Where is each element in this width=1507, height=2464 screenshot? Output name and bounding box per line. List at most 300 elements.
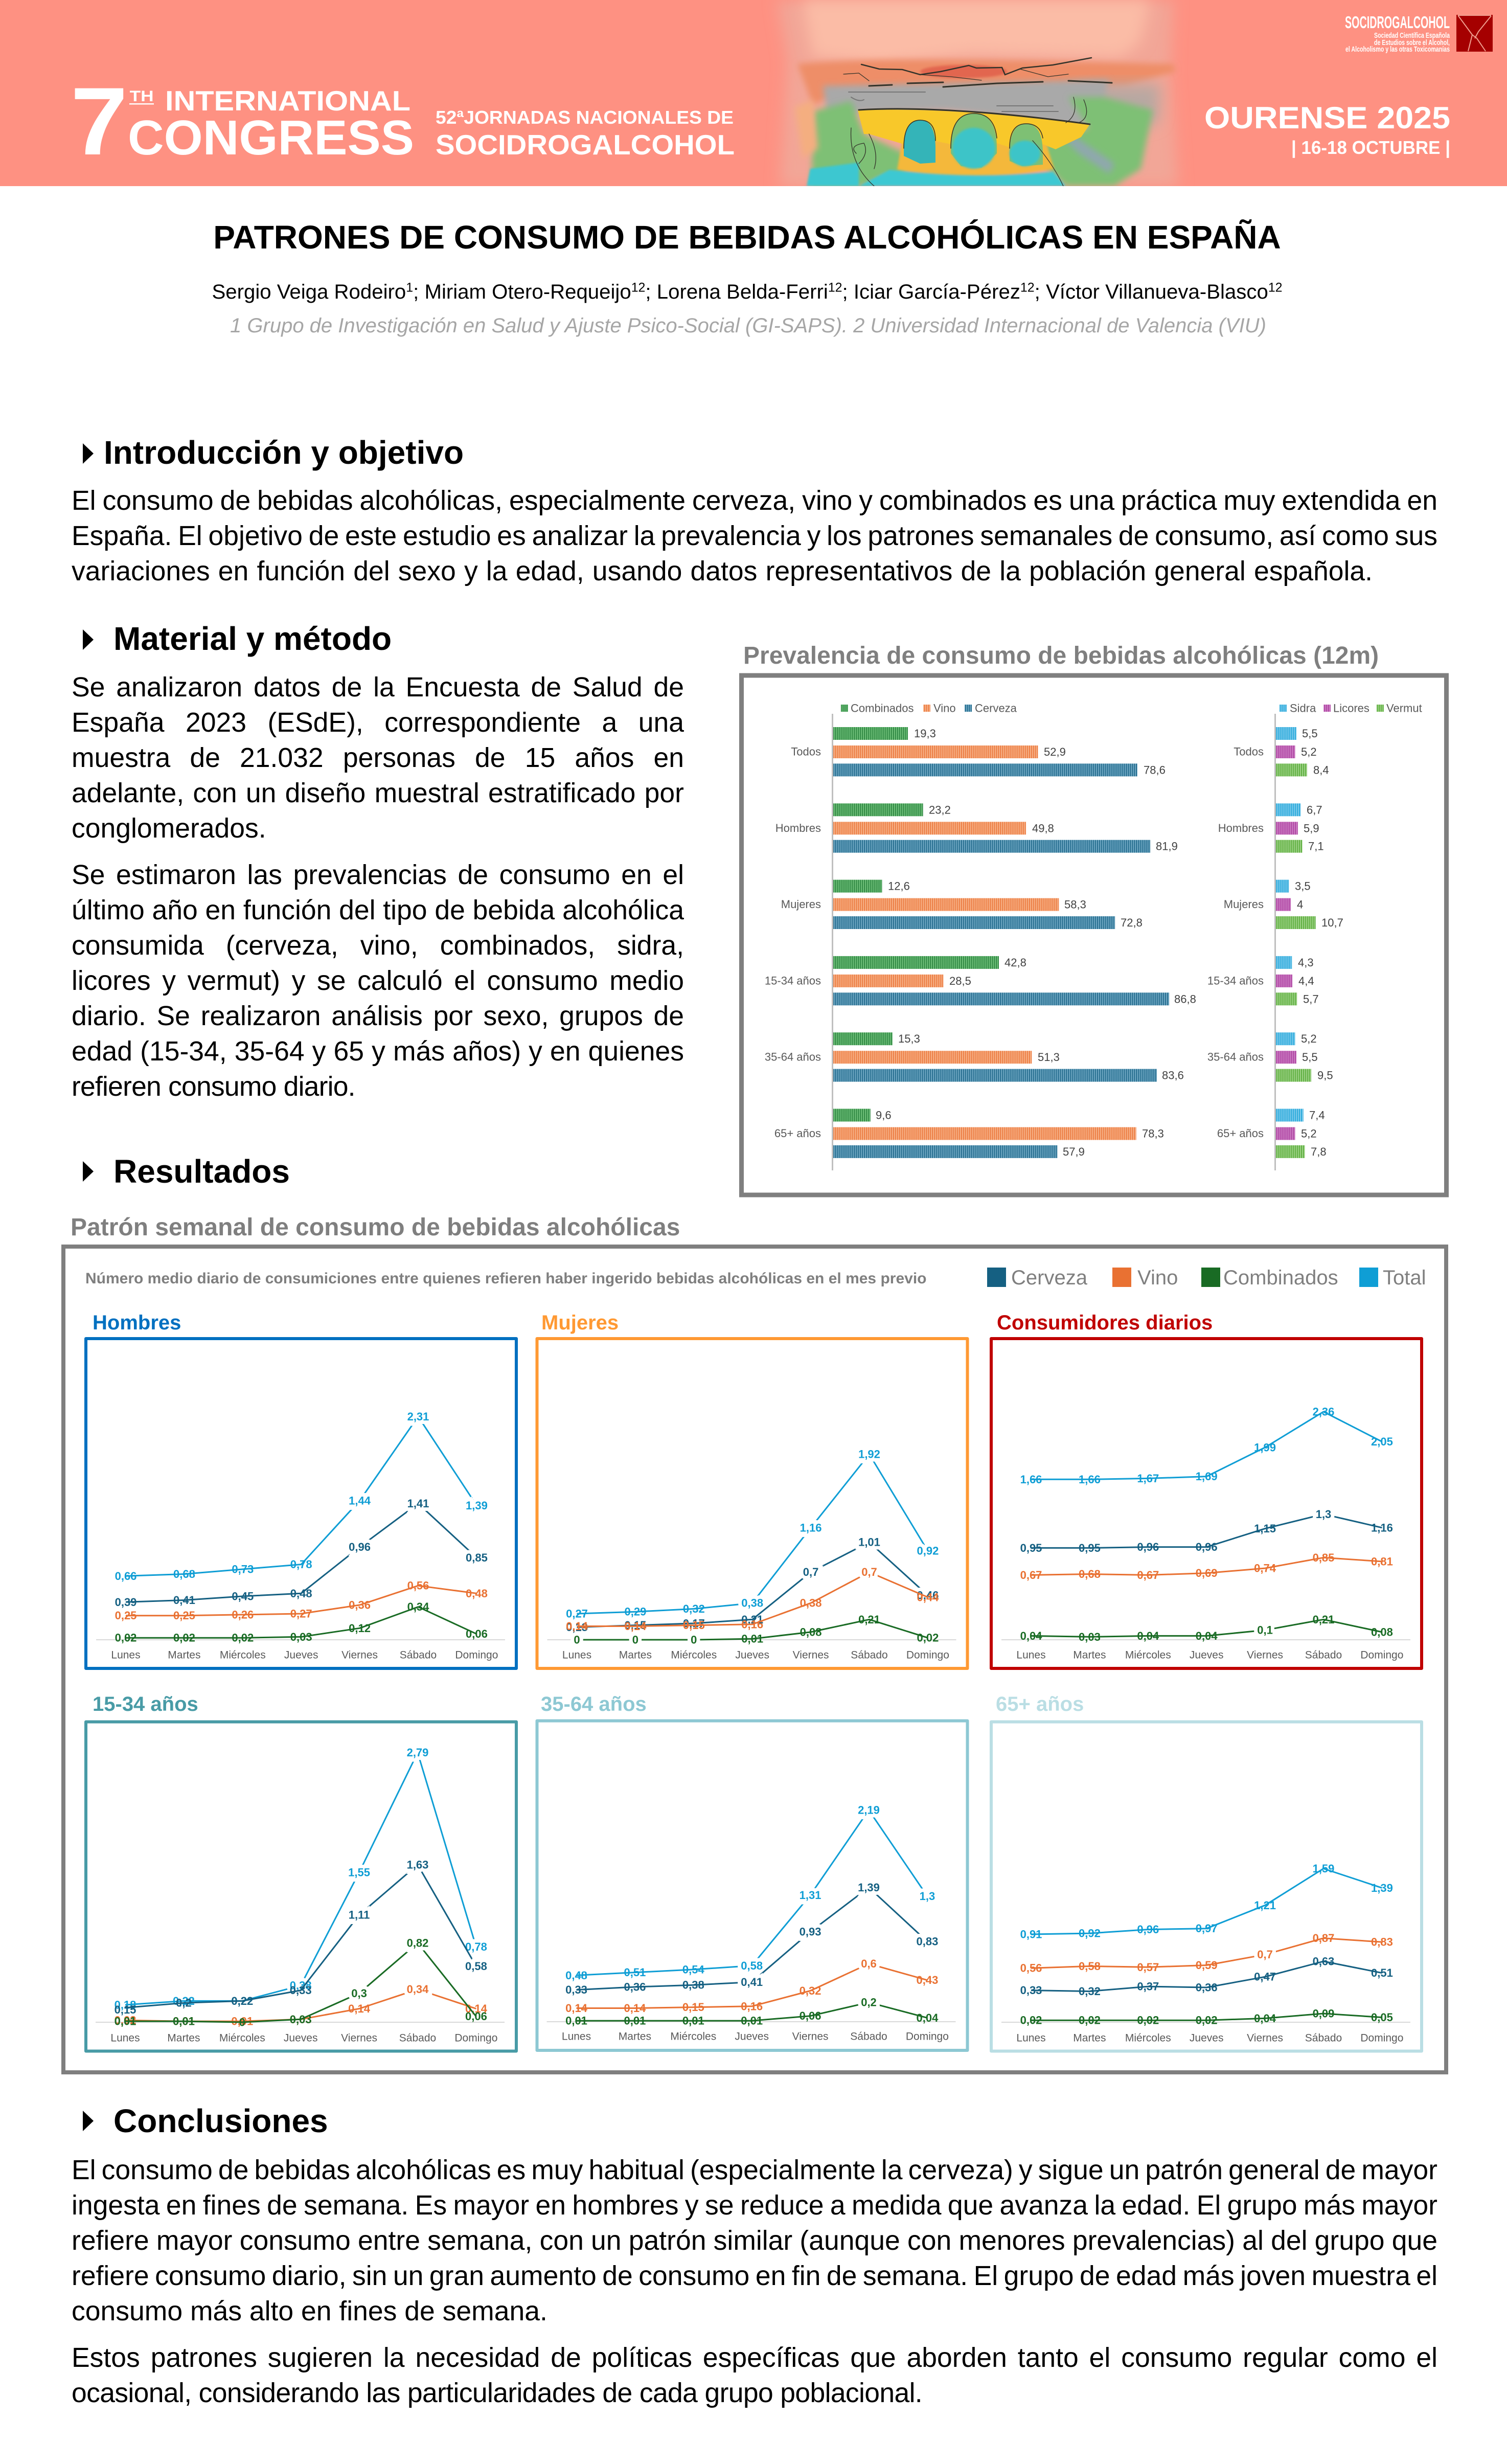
chart: Mujeres: 0,08 [800, 1625, 822, 1638]
chart: Consumidores diarios: 0,04 [1137, 1630, 1159, 1642]
bar chart: combinados, vino, cerveza: 15,3 [898, 1032, 920, 1045]
chart: 65+ años: 0,83 [1371, 1936, 1393, 1949]
chart: 35-64 años: 0,41 [741, 1976, 763, 1988]
panel: weekly pattern [63, 1247, 1446, 2072]
chart: Hombres: Martes [168, 1649, 200, 1661]
chart: Consumidores diarios: 1,16 [1371, 1521, 1393, 1534]
chart: 35-64 años [537, 1693, 967, 2050]
chart: 35-64 años: Miércoles [670, 2031, 716, 2042]
chart: Hombres: 0,68 [173, 1568, 195, 1580]
bar chart: sidra, licores, vermut: Hombres [1218, 822, 1264, 834]
chart: 65+ años: 0,36 [1196, 1981, 1218, 1994]
chart: 65+ años: 0,37 [1137, 1980, 1159, 1993]
chart: 35-64 años: Martes [619, 2031, 651, 2042]
chart: Consumidores diarios: 1,69 [1196, 1470, 1218, 1483]
chart: 35-64 años: 0,01 [565, 2015, 587, 2027]
chart: Mujeres: Domingo [906, 1649, 949, 1661]
chart: Consumidores diarios [991, 1312, 1422, 1668]
chart: 15-34 años [86, 1693, 516, 2051]
bar chart: combinados, vino, cerveza [765, 714, 1196, 1170]
text: introducción [72, 486, 1437, 586]
chart: Hombres: 0,56 [407, 1579, 429, 1592]
heading: patrón semanal: Patrón semanal de consumo de bebidas alcohólicas [71, 1214, 680, 1241]
text: material y método, párrafo 2: consumida (cerveza, vino, combinados, sidra, [72, 931, 684, 961]
chart: 35-64 años: 0,33 [565, 1983, 587, 1996]
chart: 35-64 años: 0,16 [741, 2000, 763, 2013]
bar chart: combinados, vino, cerveza: 65+ años [774, 1127, 821, 1140]
chart: 65+ años: 1,21 [1254, 1899, 1276, 1912]
chart: Hombres: 0,73 [232, 1563, 254, 1576]
bar chart: sidra, licores, vermut: 5,7 [1303, 992, 1319, 1005]
chart: Hombres: 0,45 [232, 1590, 254, 1602]
heading: 7th International Congress: CONGRESS [128, 110, 414, 165]
bar chart: sidra, licores, vermut: 7,4 [1309, 1109, 1325, 1122]
chart: 35-64 años: Lunes [562, 2031, 591, 2042]
heading: 7th International Congress: TH [130, 88, 154, 105]
chart: 65+ años: Lunes [1016, 2032, 1046, 2044]
chart: 65+ años: 0,47 [1254, 1971, 1276, 1983]
chart: 15-34 años: 1,55 [348, 1866, 370, 1879]
chart: Mujeres: 0,15 [624, 1619, 646, 1632]
chart: Hombres: 0,39 [115, 1596, 136, 1609]
chart: 65+ años: Domingo [1360, 2032, 1403, 2044]
chart: 35-64 años: 0,36 [624, 1981, 646, 1993]
bar chart: combinados, vino, cerveza: 57,9 [1063, 1145, 1085, 1158]
chart: 15-34 años: 0,02 [115, 2014, 136, 2027]
chart: 65+ años: 0,04 [1254, 2012, 1276, 2025]
chart: 15-34 años: 0,22 [231, 1995, 253, 2007]
bar chart: sidra, licores, vermut: 5,2 [1301, 1032, 1317, 1045]
chart: Hombres: 1,44 [349, 1494, 371, 1507]
chart: Hombres: 0,27 [290, 1608, 312, 1620]
bar chart: combinados, vino, cerveza: 28,5 [949, 975, 971, 987]
chart: Mujeres: 0,27 [566, 1608, 588, 1620]
chart: Consumidores diarios: 0,96 [1137, 1541, 1159, 1553]
bar chart: sidra, licores, vermut: 7,1 [1308, 840, 1324, 853]
bar chart: combinados, vino, cerveza: 52,9 [1044, 745, 1066, 758]
bar chart: combinados, vino, cerveza: 58,3 [1064, 898, 1086, 911]
chart: Mujeres: 0,16 [741, 1618, 763, 1631]
logo: Socidrogalcohol: el Alcoholismo y las otras Toxicomanías [1345, 45, 1450, 54]
chart: Consumidores diarios: Lunes [1016, 1649, 1046, 1661]
chart: 15-34 años: 0,82 [407, 1937, 428, 1949]
chart: Consumidores diarios: 0,95 [1020, 1542, 1042, 1554]
chart: 15-34 años: Lunes [110, 2032, 140, 2044]
chart: Consumidores diarios: Consumidores diarios [997, 1312, 1213, 1334]
chart: Mujeres: 0 [574, 1633, 580, 1646]
bar chart: combinados, vino, cerveza: 9,6 [876, 1109, 892, 1122]
chart: Consumidores diarios: 0,04 [1020, 1630, 1042, 1642]
text: conclusiones, párrafo 1: refiere consumo diario, sin un gran aumento de consumo en fin de semana. El grupo de edad más joven muestra el [72, 2261, 1437, 2291]
chart: 65+ años [991, 1693, 1422, 2051]
text: conclusiones, párrafo 1 [72, 2155, 1437, 2326]
chart: 15-34 años: 0,03 [290, 2013, 312, 2026]
chart: 65+ años: 0,33 [1020, 1984, 1042, 1997]
location and date [1204, 101, 1450, 159]
chart: Consumidores diarios: 0,03 [1079, 1631, 1101, 1643]
chart: Mujeres: 0,38 [800, 1597, 822, 1610]
chart: 35-64 años: 0,54 [682, 1963, 704, 1976]
chart: 35-64 años: 1,3 [920, 1890, 935, 1903]
chart: Mujeres: Lunes [562, 1649, 591, 1661]
chart: 65+ años: 0,51 [1371, 1966, 1393, 1979]
location and date: OURENSE 2025 [1204, 101, 1450, 135]
chart: Consumidores diarios: Viernes [1247, 1649, 1283, 1661]
chart: Mujeres: 0,15 [683, 1619, 705, 1632]
chart: Mujeres: 0,7 [861, 1566, 877, 1578]
logo: Socidrogalcohol: de Estudios sobre el Alcohol, [1374, 38, 1450, 47]
bar chart: sidra, licores, vermut: Todos [1234, 745, 1264, 758]
chart: 65+ años: 0,57 [1137, 1961, 1159, 1974]
chart: 35-64 años: 0,2 [861, 1996, 877, 2009]
chart: Mujeres: 0,17 [683, 1617, 705, 1630]
bar chart: sidra, licores, vermut: 10,7 [1321, 916, 1343, 929]
bar chart: sidra, licores, vermut [1207, 714, 1343, 1170]
chart: 15-34 años: 0,01 [173, 2015, 195, 2028]
chart: 65+ años: 1,39 [1371, 1882, 1393, 1894]
chart: Hombres: 0,48 [290, 1587, 312, 1600]
text: material y método, párrafo 2: licores y vermut) y se calculó el consumo medio [72, 966, 684, 996]
bar chart: sidra, licores, vermut: 4 [1297, 898, 1303, 911]
chart: Hombres: Jueves [284, 1649, 318, 1661]
chart: Consumidores diarios: 0,21 [1313, 1613, 1334, 1626]
chart: 15-34 años: 0,15 [115, 2003, 136, 2016]
heading: 7th International Congress [71, 67, 414, 175]
chart: 65+ años: 1,59 [1313, 1862, 1334, 1875]
chart: 15-34 años: 1,11 [349, 1909, 370, 1922]
heading: Resultados: Resultados [113, 1153, 290, 1190]
chart: 15-34 años: 1,63 [407, 1858, 428, 1871]
chart: 35-64 años: 1,39 [858, 1881, 880, 1894]
chart: Hombres: 0,26 [232, 1608, 254, 1621]
chart: 65+ años: Martes [1073, 2032, 1106, 2044]
chart: Consumidores diarios: 0,85 [1313, 1551, 1334, 1564]
text: material y método, párrafo 2 [72, 860, 684, 1102]
chart: 35-64 años: 1,31 [800, 1889, 821, 1902]
chart: 65+ años: 0,09 [1313, 2007, 1334, 2020]
chart: 15-34 años: 0,22 [231, 1995, 253, 2007]
chart: 15-34 años: 2,79 [407, 1746, 428, 1759]
chart: Mujeres: 1,01 [858, 1536, 880, 1549]
bar chart: sidra, licores, vermut: Mujeres [1224, 898, 1264, 911]
chart: 65+ años: 0,59 [1196, 1959, 1218, 1972]
panel: bar charts prevalence [741, 675, 1447, 1195]
chart: 65+ años: 0,58 [1079, 1960, 1101, 1973]
chart: 65+ años: 0,02 [1079, 2014, 1101, 2027]
chart: Hombres: 0,02 [232, 1632, 254, 1644]
bar chart: sidra, licores, vermut: 3,5 [1295, 880, 1311, 893]
chart: Consumidores diarios: 0,04 [1196, 1630, 1218, 1642]
chart: 35-64 años: Domingo [906, 2031, 949, 2042]
bar chart: combinados, vino, cerveza: 42,8 [1004, 956, 1026, 969]
logo: Socidrogalcohol: Sociedad Científica Española [1374, 31, 1450, 40]
chart: 35-64 años: 0,93 [800, 1926, 821, 1938]
bar chart: combinados, vino, cerveza: Todos [791, 745, 821, 758]
text: material y método, párrafo 1: adelante, con un diseño muestral estratificado por [72, 778, 684, 808]
chart: Hombres: 1,41 [407, 1497, 429, 1510]
logo: Socidrogalcohol [1345, 13, 1493, 54]
chart: 35-64 años: 0,51 [624, 1966, 646, 1979]
chart: Consumidores diarios: Jueves [1190, 1649, 1223, 1661]
chart: Consumidores diarios: 0,96 [1196, 1541, 1218, 1553]
legend: left bar chart [841, 702, 1017, 715]
text: conclusiones, párrafo 2 [72, 2343, 1437, 2408]
chart: Consumidores diarios: 1,99 [1254, 1441, 1276, 1454]
chart: Hombres: 0,48 [466, 1587, 488, 1600]
heading: Jornadas Nacionales [436, 107, 735, 161]
bar chart: sidra, licores, vermut: 35-64 años [1207, 1051, 1264, 1064]
text: material y método, párrafo 1 [72, 672, 684, 844]
chart: 15-34 años: 0,01 [173, 2015, 195, 2028]
chart: 65+ años: 65+ años [996, 1693, 1084, 1715]
chart: Hombres: 0,12 [349, 1622, 371, 1635]
text: material y método, párrafo 1: España 2023 (ESdE), correspondiente a una [72, 708, 684, 738]
legend: right bar chart [1280, 702, 1422, 715]
chart: 65+ años: 0,32 [1079, 1985, 1101, 1998]
chart: Hombres: 0,66 [115, 1570, 136, 1583]
chart: Mujeres: 1,16 [800, 1521, 822, 1534]
text: material y método, párrafo 2: Se estimaron las prevalencias de consumo en el [72, 860, 684, 890]
chart: 35-64 años: 0,06 [800, 2009, 821, 2022]
bar chart: combinados, vino, cerveza: 86,8 [1174, 992, 1196, 1005]
chart: 65+ años: 0,92 [1079, 1927, 1101, 1940]
chart: Hombres: 0,78 [290, 1558, 312, 1571]
chart: 65+ años: 0,02 [1020, 2014, 1042, 2027]
chart: 15-34 años: Jueves [284, 2032, 317, 2044]
text: material y método, párrafo 2: último año en función del tipo de bebida alcohólica [72, 895, 684, 925]
text: conclusiones, párrafo 2: ocasional, considerando las particularidades de cada grupo poblacional. [72, 2378, 922, 2408]
chart: Mujeres: 0,13 [566, 1621, 588, 1634]
chart: 15-34 años: 0,22 [173, 1995, 195, 2007]
chart: Consumidores diarios: 0,67 [1020, 1569, 1042, 1581]
illustration: bridge painting [777, 0, 1178, 186]
chart: Hombres: 0,03 [290, 1631, 312, 1643]
chart: 15-34 años: 0,01 [231, 2015, 253, 2028]
chart: 15-34 años: 0,01 [115, 2015, 136, 2028]
bar chart: sidra, licores, vermut: 65+ años [1217, 1127, 1264, 1140]
bar chart: sidra, licores, vermut: 8,4 [1313, 763, 1329, 776]
heading: Jornadas Nacionales: 52ªJORNADAS NACIONALES DE [436, 107, 734, 128]
chart: 35-64 años: 0,15 [682, 2001, 704, 2014]
chart: Mujeres: 0,92 [917, 1545, 939, 1557]
bar chart: sidra, licores, vermut: 4,4 [1298, 975, 1314, 987]
chart: Hombres: 0,25 [115, 1609, 136, 1622]
chart: Consumidores diarios: Domingo [1360, 1649, 1403, 1661]
chart: 35-64 años: 0,04 [916, 2011, 939, 2024]
chart: 15-34 años: 0,03 [290, 2013, 312, 2026]
text: material y método, párrafo 2: edad (15-34, 35-64 y 65 y más años) y en quienes [72, 1036, 684, 1067]
header banner [0, 0, 1507, 186]
chart: 65+ años: 0,63 [1313, 1955, 1334, 1968]
chart: 15-34 años: Miércoles [219, 2032, 265, 2044]
chart: Mujeres: 0,01 [741, 1633, 763, 1645]
chart: 65+ años: Miércoles [1125, 2032, 1171, 2044]
chart: 35-64 años: 0,14 [565, 2002, 588, 2015]
chart: 35-64 años: 35-64 años [541, 1693, 647, 1715]
chart: Hombres: Sábado [400, 1649, 437, 1661]
chart: 65+ años: 0,05 [1371, 2011, 1393, 2024]
chart: Mujeres: 0,38 [741, 1597, 763, 1610]
chart: Hombres: 1,39 [466, 1499, 488, 1512]
chart: 15-34 años: 0,14 [348, 2002, 371, 2015]
legend: right bar chart: Vermut [1386, 702, 1422, 715]
legend: series: Total [1383, 1267, 1426, 1289]
chart: Hombres: 0,25 [173, 1609, 195, 1622]
chart: Mujeres: Viernes [793, 1649, 829, 1661]
heading: 7th International Congress: 7 [71, 67, 128, 175]
chart: Hombres: 0,85 [466, 1551, 488, 1564]
text: material y método, párrafo 1: conglomerados. [72, 813, 266, 844]
chart: 15-34 años: Viernes [341, 2032, 377, 2044]
title: PATRONES DE CONSUMO DE BEBIDAS ALCOHÓLICAS EN ESPAÑA [213, 219, 1281, 256]
chart: Mujeres: 0,02 [917, 1632, 939, 1644]
chart: Mujeres: Martes [619, 1649, 652, 1661]
bar chart: combinados, vino, cerveza: 23,2 [929, 803, 951, 816]
chart: Consumidores diarios: 1,66 [1079, 1473, 1101, 1486]
heading: Material y método: Material y método [113, 620, 392, 657]
chart: 35-64 años: 0,01 [741, 2015, 763, 2027]
chart: Hombres: Viernes [341, 1649, 378, 1661]
bar chart: sidra, licores, vermut: 7,8 [1311, 1145, 1327, 1158]
chart: Consumidores diarios: 0,08 [1371, 1625, 1393, 1638]
chart: Mujeres: Miércoles [671, 1649, 717, 1661]
chart: Consumidores diarios: 0,68 [1079, 1568, 1101, 1580]
bar chart: combinados, vino, cerveza: Mujeres [781, 898, 821, 911]
chart: 15-34 años: Martes [167, 2032, 200, 2044]
chart: Consumidores diarios: 1,3 [1316, 1508, 1331, 1521]
chart: Hombres: 0,06 [466, 1627, 488, 1640]
chart: Mujeres: Jueves [735, 1649, 769, 1661]
chart: 35-64 años: 0,32 [800, 1984, 821, 1997]
chart: 15-34 años: 0,34 [407, 1983, 429, 1996]
chart: Hombres: Lunes [111, 1649, 141, 1661]
chart: Consumidores diarios: 0,74 [1254, 1562, 1276, 1575]
chart: Mujeres: 0,7 [803, 1566, 818, 1578]
chart: Mujeres: 1,92 [858, 1448, 880, 1461]
chart: 15-34 años: Sábado [399, 2032, 436, 2044]
bar chart: combinados, vino, cerveza: 35-64 años [765, 1051, 821, 1064]
chart: 15-34 años: 0,06 [465, 2010, 487, 2023]
chart: Mujeres: 0,21 [858, 1613, 880, 1626]
chart: Consumidores diarios: 1,66 [1020, 1473, 1042, 1486]
heading: Introducción y objetivo: Introducción y objetivo [104, 434, 464, 471]
bar chart: combinados, vino, cerveza: 15-34 años [765, 974, 821, 987]
bar chart: combinados, vino, cerveza: 83,6 [1162, 1069, 1184, 1082]
legend: left bar chart: Vino [933, 702, 956, 715]
chart: 35-64 años: 0,83 [916, 1935, 938, 1948]
chart: Consumidores diarios: 1,67 [1137, 1472, 1159, 1485]
bar chart: sidra, licores, vermut: 5,2 [1301, 745, 1317, 758]
chart: Consumidores diarios: 2,05 [1371, 1435, 1393, 1448]
chart: Hombres: 2,31 [407, 1410, 429, 1423]
heading: Conclusiones: Conclusiones [113, 2103, 328, 2139]
legend: series: Cerveza [1011, 1267, 1088, 1289]
chart: 35-64 años: 2,19 [858, 1804, 880, 1817]
chart: Hombres: Hombres [93, 1312, 181, 1334]
chart: 35-64 años: 0,6 [861, 1957, 877, 1970]
chart: 15-34 años: 0,3 [351, 1987, 367, 2000]
chart: 65+ años: 0,02 [1196, 2014, 1218, 2027]
chart: Consumidores diarios: 0,95 [1079, 1542, 1101, 1554]
chart: 15-34 años: 0,33 [290, 1984, 312, 1997]
chart: 65+ años: 0,7 [1257, 1948, 1273, 1961]
bar chart: combinados, vino, cerveza: 49,8 [1032, 822, 1054, 834]
chart: 35-64 años: Viernes [792, 2031, 829, 2042]
text: material y método, párrafo 1: muestra de 21.032 personas de 15 años en [72, 743, 684, 773]
chart: Consumidores diarios: Martes [1073, 1649, 1106, 1661]
text: material y método, párrafo 1: Se analizaron datos de la Encuesta de Salud de [72, 672, 684, 703]
chart: 65+ años: 0,87 [1313, 1932, 1334, 1945]
chart note: Número medio diario de consumiciones entre quienes refieren haber ingerido bebidas alcohólicas en el mes previo [85, 1270, 926, 1287]
chart: Hombres [86, 1312, 516, 1668]
chart: Mujeres: 0,32 [683, 1602, 705, 1615]
chart: Consumidores diarios: 1,15 [1254, 1522, 1276, 1535]
bar chart: combinados, vino, cerveza: 12,6 [888, 880, 910, 893]
heading: Jornadas Nacionales: SOCIDROGALCOHOL [436, 129, 735, 161]
chart: Consumidores diarios: Miércoles [1125, 1649, 1171, 1661]
bar chart: combinados, vino, cerveza: 78,6 [1144, 763, 1166, 776]
bar chart: combinados, vino, cerveza: 51,3 [1038, 1051, 1060, 1064]
bar chart: sidra, licores, vermut: 15-34 años [1207, 974, 1264, 987]
chart: Hombres: 0,36 [349, 1598, 371, 1612]
chart: Hombres: Domingo [455, 1649, 498, 1661]
location and date: | 16-18 OCTUBRE | [1291, 137, 1450, 159]
chart: Mujeres: Mujeres [541, 1312, 619, 1334]
bar chart: combinados, vino, cerveza: 78,3 [1142, 1127, 1164, 1140]
legend: series: Combinados [1223, 1267, 1338, 1289]
authors: Sergio Veiga Rodeiro1; Miriam Otero-Requeijo12; Lorena Belda-Ferri12; Iciar García-Pérez12; Víctor Villanueva-Blasco12 [212, 280, 1283, 303]
legend: series: Vino [1137, 1267, 1178, 1289]
bar chart: sidra, licores, vermut: 6,7 [1307, 803, 1322, 816]
bar chart: sidra, licores, vermut: 5,2 [1301, 1127, 1317, 1140]
chart: 65+ años: Sábado [1305, 2032, 1342, 2044]
chart: 35-64 años: 0,01 [682, 2015, 704, 2027]
chart: 65+ años: 0,91 [1020, 1928, 1042, 1941]
chart: 15-34 años: 15-34 años [93, 1693, 198, 1715]
chart: 35-64 años: 0,58 [741, 1959, 763, 1972]
affiliations: 1 Grupo de Investigación en Salud y Ajuste Psico-Social (GI-SAPS). 2 Universidad Internacional de Valencia (VIU) [230, 314, 1266, 337]
chart: 65+ años: 0,56 [1020, 1962, 1042, 1975]
text: material y método, párrafo 2: refieren consumo diario. [72, 1072, 355, 1102]
chart: Mujeres: 0 [691, 1633, 697, 1646]
chart: 15-34 años: 0,2 [176, 1997, 192, 2009]
chart: 35-64 años: 0,43 [916, 1974, 938, 1986]
chart: 35-64 años: Sábado [850, 2031, 887, 2042]
text: material y método, párrafo 2: diario. Se realizaron análisis por sexo, grupos de [72, 1001, 684, 1031]
chart: 15-34 años: 0,78 [465, 1940, 487, 1953]
bar chart: sidra, licores, vermut: 5,5 [1302, 727, 1318, 740]
chart: Mujeres: Sábado [851, 1649, 888, 1661]
chart: Hombres: 0,34 [407, 1600, 429, 1613]
chart: 15-34 años: 0,58 [465, 1960, 487, 1973]
chart: Hombres: 0,02 [115, 1632, 136, 1644]
chart: Consumidores diarios: 0,81 [1371, 1555, 1393, 1568]
chart: Mujeres: 0,14 [624, 1620, 647, 1633]
chart: Mujeres: 0,44 [917, 1591, 939, 1603]
text: introducción: El consumo de bebidas alcohólicas, especialmente cerveza, vino y combinados es una práctica muy extendida en [72, 486, 1437, 516]
bar chart: sidra, licores, vermut: 4,3 [1298, 956, 1314, 969]
chart: 35-64 años: 0,38 [682, 1979, 704, 1992]
chart: 15-34 años: 0 [239, 2016, 245, 2029]
chart: Hombres: 0,41 [173, 1594, 195, 1607]
chart: 35-64 años: Jueves [735, 2031, 769, 2042]
chart: 65+ años: 0,02 [1137, 2014, 1159, 2027]
text: conclusiones, párrafo 1: ingesta en fines de semana. Es mayor en hombres y se reduce a medida que avanza la edad. El grupo más mayor [72, 2190, 1437, 2221]
bar chart: combinados, vino, cerveza: 19,3 [914, 727, 936, 740]
chart: Mujeres: 0,21 [741, 1613, 763, 1626]
chart: Mujeres: 0,29 [624, 1606, 646, 1618]
heading: prevalencia: Prevalencia de consumo de bebidas alcohólicas (12m) [743, 642, 1379, 669]
